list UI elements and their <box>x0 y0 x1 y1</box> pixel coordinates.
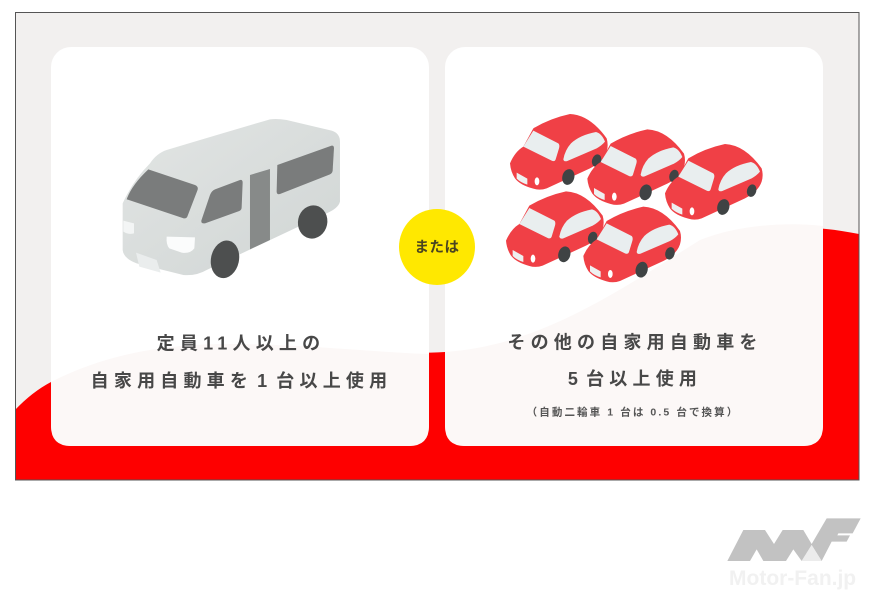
panel: large van <box>51 47 429 446</box>
logo mark <box>727 518 861 561</box>
background frame <box>16 12 859 480</box>
left card <box>51 47 429 446</box>
red wave band <box>15 227 859 480</box>
badge label: または <box>414 239 460 256</box>
right card <box>445 47 823 446</box>
left heading line 1: 定員11人以上の <box>157 334 325 354</box>
right heading line 1: その他の自家用自動車を <box>507 332 763 352</box>
panel: five cars <box>445 47 823 446</box>
logo wordmark: Motor-Fan.jp <box>729 567 856 590</box>
icon: five red cars <box>506 114 763 282</box>
right heading line 2: 5台以上使用 <box>568 368 702 389</box>
logo: Motor-Fan <box>727 518 861 590</box>
yellow circle <box>399 209 475 285</box>
footnote: （自動二輪車 1 台は 0.5 台で換算） <box>527 406 739 418</box>
frame outline <box>16 12 859 480</box>
right card lower tint <box>445 224 823 446</box>
left heading line 2: 自家用自動車を1台以上使用 <box>91 370 392 391</box>
left card lower tint <box>51 344 429 446</box>
icon: grey van <box>123 119 340 281</box>
badge: または <box>399 209 475 285</box>
